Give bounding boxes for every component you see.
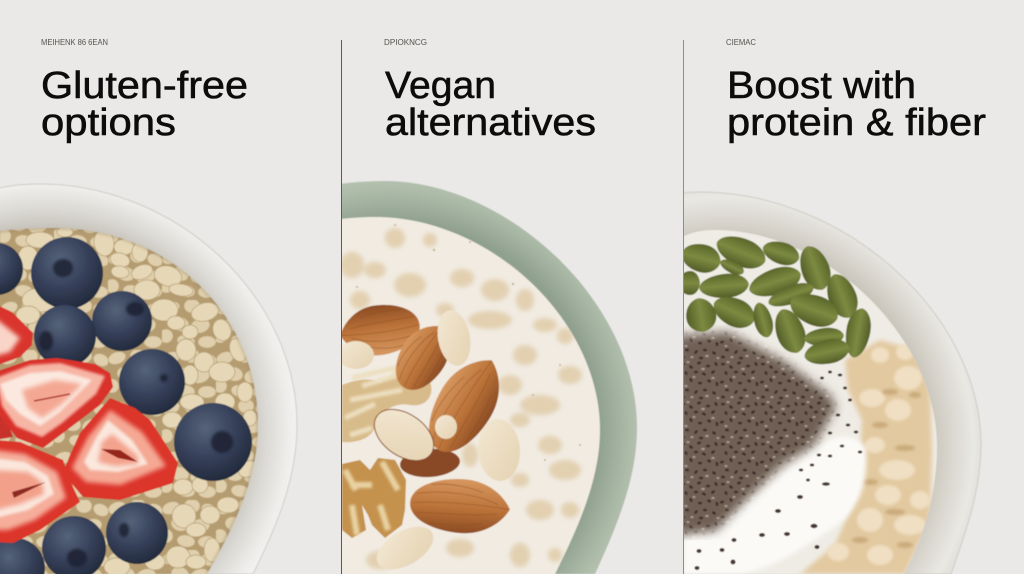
shadow at oat edge <box>0 228 258 574</box>
walnut lower <box>342 458 406 538</box>
pumpkin seeds <box>678 229 874 369</box>
almond <box>428 360 500 452</box>
strawberry slice: small middle <box>0 412 13 440</box>
blueberry <box>106 502 168 564</box>
blueberry <box>174 403 252 481</box>
heading: gluten-free options: options <box>41 102 176 144</box>
panel: gluten-free options <box>0 38 297 574</box>
blueberry calyx marks <box>39 259 233 567</box>
heading: gluten-free options: Gluten-free <box>41 65 248 107</box>
blueberry <box>92 291 152 351</box>
blanched almond chip <box>435 415 457 439</box>
cream bowl of oats with pumpkin seeds, chia and yogurt <box>676 192 981 574</box>
blueberry <box>119 349 185 415</box>
dark almond beneath slice <box>399 447 461 479</box>
heading: gluten-free options <box>41 65 248 144</box>
divider line between panels 1 and 2 <box>341 40 342 574</box>
blueberry <box>42 516 106 574</box>
almond <box>410 478 510 534</box>
rolled oats <box>0 220 270 574</box>
strawberry slice: large left <box>0 358 113 448</box>
blueberry <box>0 243 23 295</box>
panel: vegan alternatives <box>337 38 637 574</box>
blanched almond slice <box>373 408 435 461</box>
bowl rim <box>0 184 297 574</box>
bowl rim <box>682 192 981 574</box>
panel: boost with protein and fiber <box>676 38 986 574</box>
heading: vegan alternatives <box>384 72 595 136</box>
eyebrow label: gluten-free: MEIHENK 86 6EAN <box>41 38 108 47</box>
eyebrow label: boost: CIEMAC <box>726 38 756 47</box>
sage green bowl of oats with almonds and walnuts <box>337 181 637 574</box>
divider line between panels 2 and 3 <box>683 40 684 574</box>
strawberry slice: large centre <box>63 398 178 500</box>
blanched almond slice <box>376 526 434 570</box>
walnut upper <box>342 368 431 442</box>
blueberry <box>0 538 45 574</box>
strawberry slice: small top <box>0 304 33 366</box>
white bowl of oats with blueberries and strawberries <box>0 184 297 574</box>
heading: boost with protein and fiber <box>727 65 986 144</box>
bowl rim <box>340 181 637 574</box>
heading: vegan alternatives: alternatives <box>385 102 596 144</box>
heading: vegan alternatives: Vegan <box>385 65 496 107</box>
blanched almond slice <box>436 310 471 366</box>
scattered chia seeds <box>694 370 862 570</box>
blueberry <box>34 305 96 367</box>
heading: boost with protein and fiber: Boost with <box>727 65 916 107</box>
blueberry <box>31 237 103 309</box>
eyebrow label: vegan: DPIOKNCG <box>384 38 427 47</box>
cooked oats <box>800 340 932 574</box>
blanched almond slice <box>478 419 520 482</box>
almond <box>395 326 448 390</box>
heading: boost with protein and fiber: protein & fiber <box>727 102 986 144</box>
bowl interior <box>676 225 942 574</box>
almond <box>342 304 420 356</box>
milky oats <box>340 210 610 574</box>
yogurt <box>684 436 866 574</box>
strawberry slice: large lower <box>0 440 80 543</box>
chia seed mound <box>676 325 846 540</box>
blanched almond slice <box>338 341 374 369</box>
